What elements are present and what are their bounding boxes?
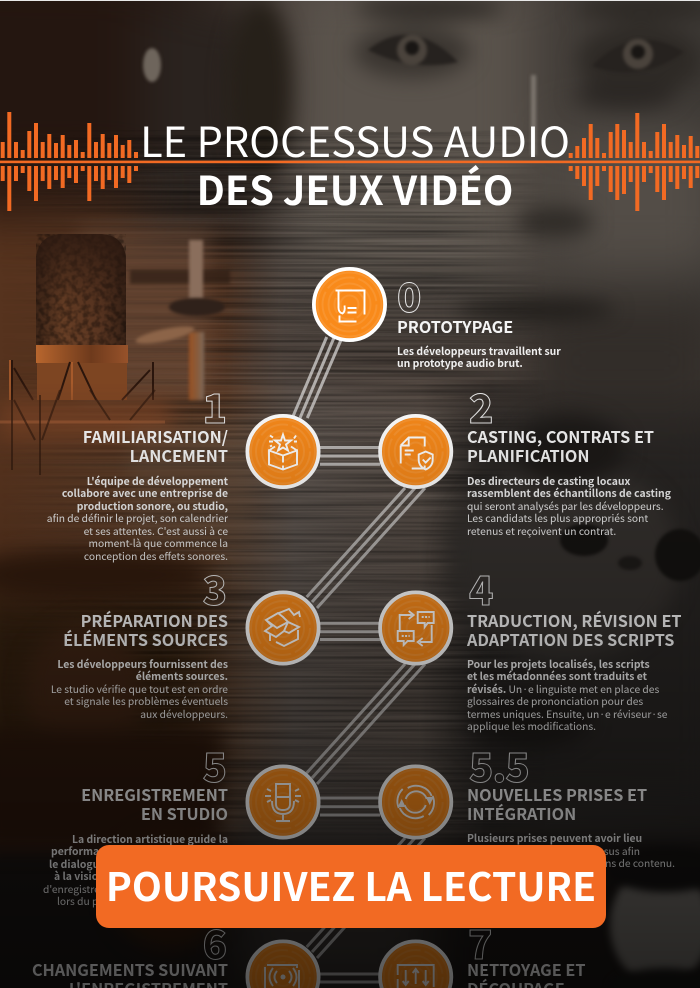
step 5: enregistrement: ENREGISTREMENT: [81, 782, 228, 806]
step 5: enregistrement: à la vision du projet: [54, 868, 154, 883]
step 1: familiarisation: afin de définir le projet, son calendrier: [47, 510, 228, 525]
circle 4: translation bubbles icon: [380, 592, 451, 664]
title line 1: LE PROCESSUS AUDIO: [140, 109, 570, 169]
cartoon creature: [450, 415, 700, 748]
step 5: enregistrement: le dialogue et la conformité: [49, 856, 189, 871]
studio microphone: [10, 230, 230, 400]
circle 5.5: retake cycle icon: [380, 766, 451, 838]
title rule: [0, 161, 700, 163]
call to action button: [96, 845, 606, 928]
circle 3: open box icon: [247, 592, 319, 664]
call to action button: POURSUIVEZ LA LECTURE: [106, 857, 596, 913]
top white edge: [0, 0, 700, 1]
step 5.5: nouvelles prises: Plusieurs prises peuvent avoir lieu: [467, 830, 642, 845]
step 4: traduction: termes uniques. Ensuite, un·e réviseur·se: [467, 706, 667, 721]
step 7: nettoyage: NETTOYAGE ET: [467, 957, 585, 981]
step 3: préparation: [51, 575, 228, 721]
circle 6: broadcast frame icon: [247, 941, 319, 988]
step 5: enregistrement: EN STUDIO: [141, 801, 228, 825]
step 3: préparation: Les développeurs fournissent des: [57, 656, 228, 671]
step 5: enregistrement: d'enregistrement: [43, 881, 125, 896]
step 3: préparation: et signale les problèmes éventuels: [64, 693, 228, 708]
step 4: traduction: applique les modifications.: [467, 718, 596, 733]
lower dark area with portrait: [0, 730, 700, 988]
step 5: enregistrement: [43, 752, 228, 908]
step 5.5: nouvelles prises: INTÉGRATION: [467, 801, 576, 825]
step 4: traduction: TRADUCTION, RÉVISION ET: [467, 608, 682, 632]
step 6: changements: CHANGEMENTS SUIVANT: [32, 957, 228, 981]
step 5.5: nouvelles prises: selon les besoins de contenu.: [535, 855, 675, 870]
step 2: casting: Des directeurs de casting locaux: [467, 473, 630, 488]
step 2: casting: CASTING, CONTRATS ET: [467, 424, 654, 448]
step 1: familiarisation: L'équipe de développement: [87, 473, 228, 488]
step 3: préparation: aux développeurs.: [140, 706, 228, 721]
step 4: traduction: Pour les projets localisés, les scripts: [467, 656, 650, 671]
waveform: right: [571, 113, 697, 211]
horizontal glitch streaks: [49, 132, 518, 820]
circle 0: script icon: [314, 269, 385, 340]
step 3: préparation: éléments sources.: [136, 668, 228, 683]
step 2: casting: PLANIFICATION: [467, 443, 590, 467]
step 3: préparation: PRÉPARATION DES: [81, 608, 228, 632]
step 5.5: nouvelles prises: au cours du processus afin: [514, 842, 640, 858]
step 0: prototypage: PROTOTYPAGE: [397, 314, 513, 338]
step 2: casting: [467, 393, 671, 538]
step 4: traduction: révisés. Un·e linguiste met en place des: [467, 681, 659, 696]
step 2: casting: Les candidats les plus appropriés sont: [467, 510, 648, 525]
header waveform: [0, 112, 700, 211]
step 4: traduction: et les métadonnées sont traduits et: [467, 668, 647, 683]
step 4: traduction: [467, 576, 682, 733]
step 0: prototypage: Les développeurs travaillent sur: [397, 343, 561, 358]
step 1: familiarisation: collabore avec une entreprise de: [62, 485, 228, 500]
step 1: familiarisation: et ses attentes. C'est aussi à ce: [84, 523, 228, 538]
step 5.5: nouvelles prises: [467, 752, 675, 870]
face: eyes, nose and mouth: [143, 0, 700, 320]
step 0: prototypage: [397, 282, 561, 370]
title: [140, 109, 570, 217]
connector lines: [292, 337, 425, 982]
step 3: préparation: Le studio vérifie que tout est en ordre: [51, 681, 228, 696]
title line 2: DES JEUX VIDÉO: [197, 160, 513, 217]
step 5: enregistrement: lors du processus: [57, 893, 140, 908]
step 4: traduction: glossaires de prononciation pour des: [467, 693, 643, 708]
step 1: familiarisation: [47, 394, 228, 563]
circle 7: sliders icon: [380, 941, 451, 988]
bottom fade overlay: [0, 380, 700, 988]
step 1: familiarisation: LANCEMENT: [130, 443, 228, 467]
step 5: enregistrement: La direction artistique guide la: [72, 831, 228, 846]
step 3: préparation: ÉLÉMENTS SOURCES: [63, 627, 228, 651]
left keyboard and portrait shading: [0, 390, 250, 758]
circle 5: microphone icon: [247, 766, 319, 838]
circle 2: contract with shield icon: [380, 416, 451, 487]
circle 1: box with star icon: [247, 416, 319, 487]
step 7: nettoyage: [467, 930, 585, 988]
step 1: familiarisation: FAMILIARISATION/: [83, 424, 228, 448]
waveform: left: [3, 112, 136, 211]
step 2: casting: retenus et reçoivent un contrat.: [467, 523, 616, 538]
step 0: prototypage: un prototype audio brut.: [397, 355, 523, 370]
step 1: familiarisation: moment-là que commence la: [88, 535, 228, 550]
step 6: changements: [32, 929, 228, 988]
step 4: traduction: ADAPTATION DES SCRIPTS: [467, 627, 674, 651]
step 5: enregistrement: performance des interprètes: [51, 843, 197, 858]
step 2: casting: qui seront analysés par les développeurs.: [467, 498, 664, 513]
step 2: casting: rassemblent des échantillons de casting: [467, 485, 671, 500]
step 1: familiarisation: conception des effets sonores.: [84, 548, 228, 563]
step 1: familiarisation: production sonore, ou studio,: [77, 498, 228, 513]
step 5.5: nouvelles prises: NOUVELLES PRISES ET: [467, 782, 647, 806]
